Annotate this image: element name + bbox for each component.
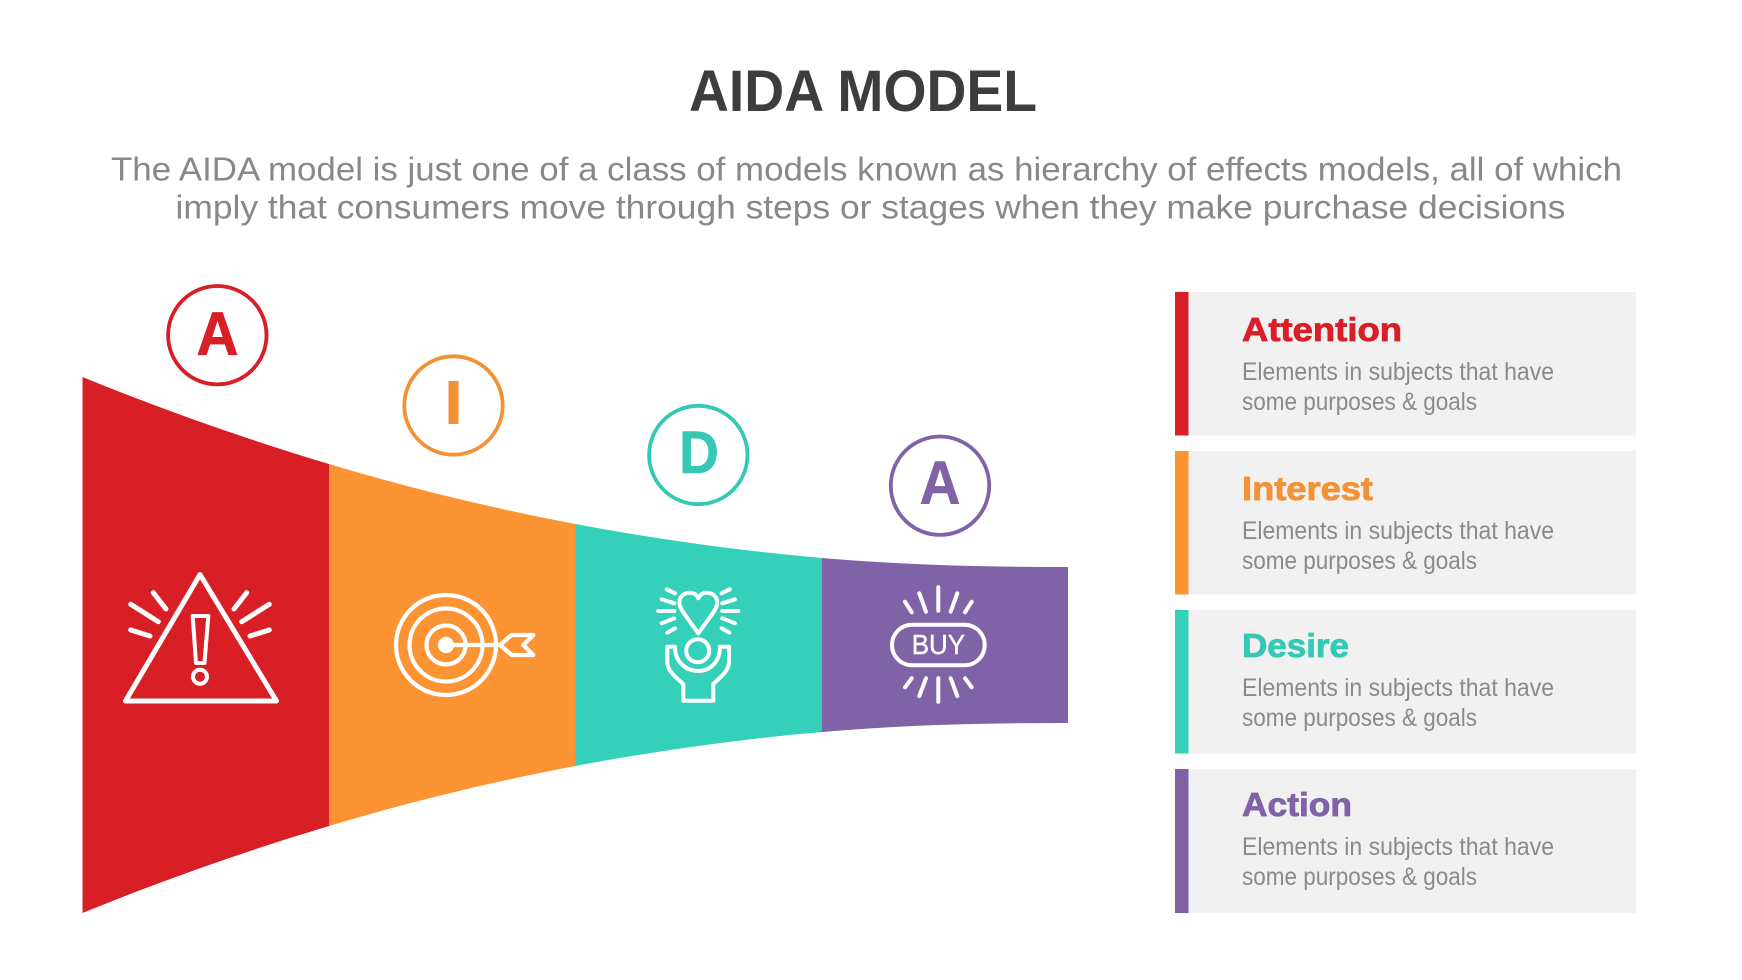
- letter badge: I orange: [404, 356, 503, 455]
- text block: interest description: some purposes & goals: [1242, 547, 1477, 575]
- heading: interest: Interest: [1242, 470, 1373, 507]
- letter badge: A purple: A: [920, 449, 960, 517]
- icon: buy button: BUY: [912, 629, 965, 660]
- text block: desire description: [1242, 674, 1554, 732]
- funnel segment: interest: [329, 464, 576, 826]
- subtitle: The AIDA model is just one of a class of models known as hierarchy of effects models, all of which: [111, 150, 1622, 188]
- panel: action: [1175, 769, 1636, 913]
- subtitle: [111, 150, 1622, 226]
- subtitle: imply that consumers move through steps or stages when they make purchase decisions: [176, 188, 1566, 226]
- heading: desire: Desire: [1242, 627, 1349, 664]
- title: AIDA MODEL: [689, 59, 1037, 124]
- letter badge: D teal: [649, 406, 748, 504]
- text block: action description: [1242, 833, 1554, 891]
- funnel segment: action: [822, 558, 1068, 732]
- icon: target with arrow: [396, 595, 533, 695]
- panel: interest: [1175, 451, 1636, 594]
- text block: attention description: some purposes & goals: [1242, 388, 1477, 416]
- text block: action description: Elements in subjects that have: [1242, 833, 1554, 861]
- letter badge: A red: A: [196, 300, 238, 368]
- text block: desire description: Elements in subjects that have: [1242, 674, 1554, 702]
- heading: attention: Attention: [1242, 311, 1402, 348]
- icon: warning triangle: [126, 574, 276, 701]
- letter badge: A red: [168, 286, 266, 384]
- panel: attention: [1175, 292, 1636, 436]
- funnel segment: attention: [82, 377, 329, 913]
- panel: desire: [1175, 610, 1636, 754]
- letter badge: D teal: D: [679, 419, 719, 486]
- text block: interest description: [1242, 517, 1554, 575]
- icon: heart and raised hands: [658, 589, 738, 701]
- text block: desire description: some purposes & goals: [1242, 704, 1477, 732]
- heading: action: Action: [1242, 786, 1352, 823]
- text block: action description: some purposes & goals: [1242, 863, 1477, 891]
- letter badge: A purple: [891, 436, 989, 535]
- text block: attention description: Elements in subjects that have: [1242, 358, 1554, 386]
- funnel chart: [82, 377, 1068, 913]
- text block: interest description: Elements in subjects that have: [1242, 517, 1554, 545]
- icon: buy button: [892, 587, 985, 702]
- text block: attention description: [1242, 358, 1554, 416]
- funnel segment: desire: [576, 524, 822, 766]
